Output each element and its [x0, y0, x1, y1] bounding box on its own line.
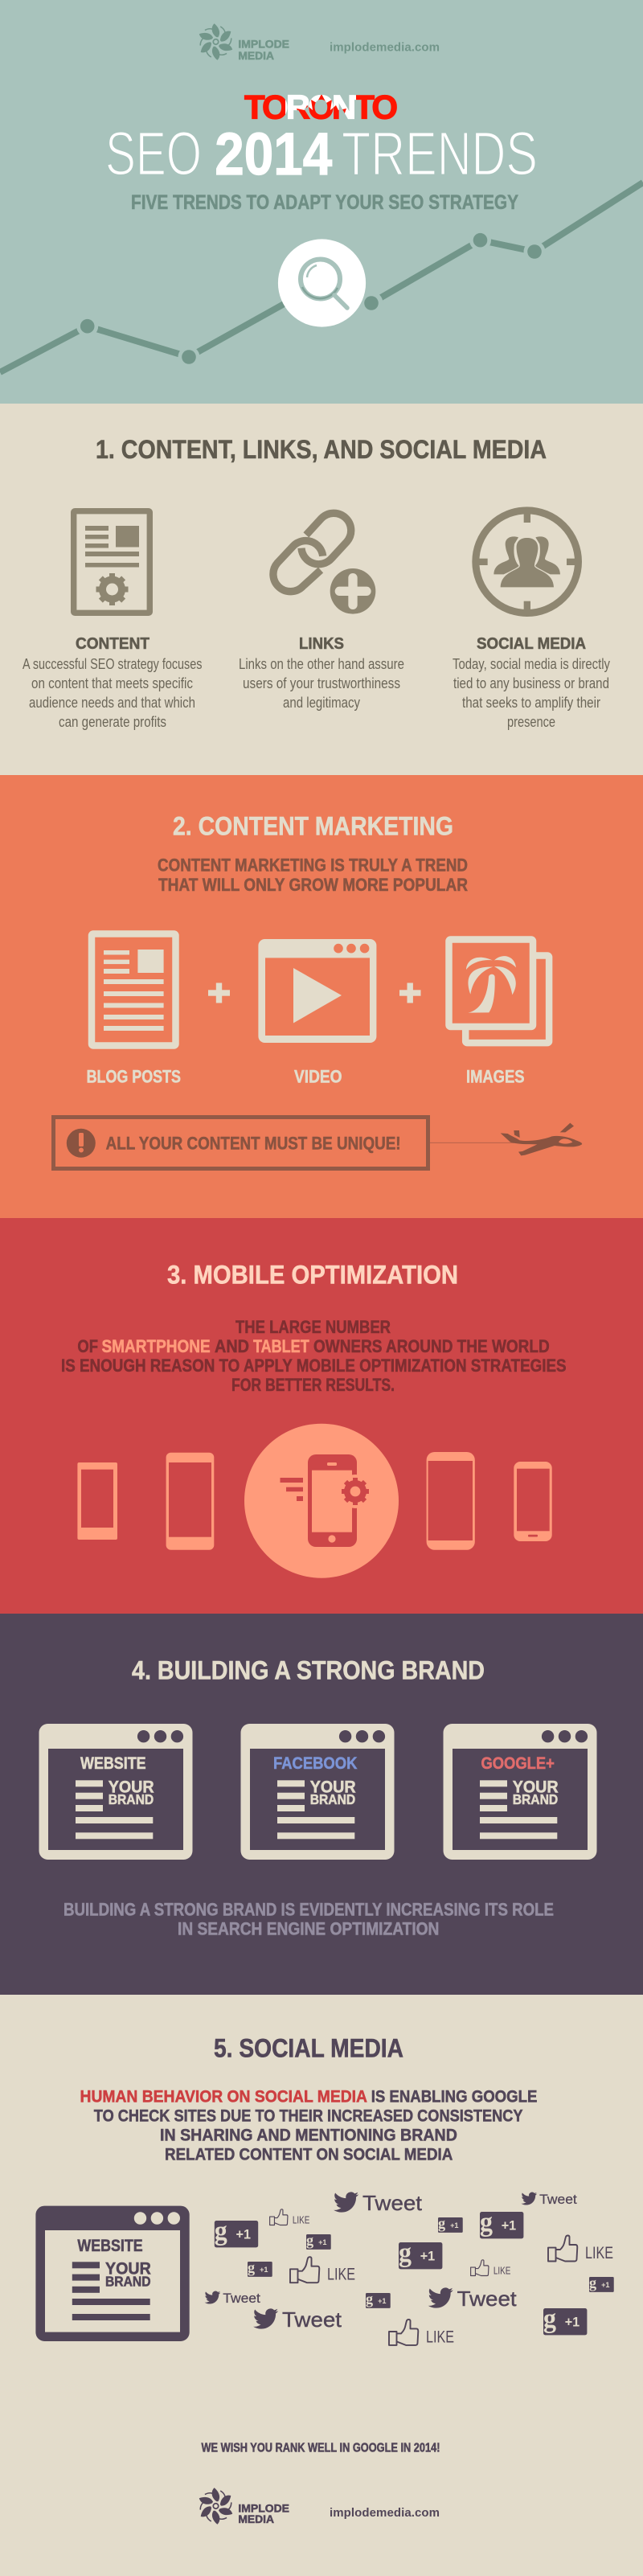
logo: Implode Media footer: IMPLODE [238, 2502, 289, 2515]
browser window: website: BRAND [105, 2273, 151, 2289]
column: links: users of your trustworthiness [243, 675, 400, 691]
icon: content document [74, 511, 149, 613]
google plus one button [480, 2208, 523, 2238]
label: images: IMAGES [466, 1066, 524, 1087]
browser window: website: YOUR [109, 1778, 154, 1796]
logo: Implode Media: MEDIA [238, 49, 274, 62]
column: social media: tied to any business or brand [453, 675, 609, 691]
google plus one button [215, 2217, 258, 2247]
small like button [471, 2260, 511, 2276]
panel: 1. content, links, and social media [0, 404, 643, 775]
small google plus one button: +1 [601, 2281, 610, 2290]
logo: Implode Media footer [195, 2488, 289, 2525]
body text: TABLET [253, 1336, 309, 1356]
logo url: implodemedia.com [330, 40, 440, 55]
intro text [158, 855, 468, 895]
browser window: facebook: FACEBOOK [273, 1754, 357, 1773]
icon: central mobile phone with gear [244, 1424, 399, 1578]
intro text: THAT WILL ONLY GROW MORE POPULAR [158, 875, 468, 895]
icon: phone 4 [514, 1462, 552, 1541]
line chart: rising trend [0, 183, 643, 372]
google plus one button: g [215, 2217, 227, 2246]
small google plus one button: g [248, 2260, 255, 2277]
column: social media: that seeks to amplify their [462, 694, 600, 711]
heading: 4. BUILDING A STRONG BRAND [132, 1656, 485, 1685]
small google plus one button: g [366, 2291, 373, 2308]
like button: LIKE [585, 2244, 613, 2262]
title: SEO 2014 Trends: SEO [105, 119, 202, 188]
icon: social media people in target [476, 511, 578, 613]
heading: 1. CONTENT, LINKS, AND SOCIAL MEDIA [96, 435, 547, 464]
caption [63, 1899, 554, 1938]
browser window: facebook [241, 1724, 394, 1860]
small tweet button [521, 2192, 577, 2207]
column: social media: Today, social media is directly [453, 655, 611, 672]
small google plus one button: +1 [318, 2238, 327, 2247]
like button [389, 2320, 454, 2346]
heading: 3. MOBILE OPTIMIZATION [167, 1261, 458, 1290]
small google plus one button [438, 2216, 463, 2233]
google plus one button: g [480, 2208, 493, 2238]
small google plus one button [366, 2291, 391, 2308]
title: SEO 2014 Trends: TRENDS [342, 119, 538, 188]
small tweet button: Tweet [539, 2192, 577, 2207]
browser window: website [35, 2206, 190, 2341]
google plus one button [543, 2304, 587, 2335]
panel: header [0, 0, 643, 404]
browser window: google plus: YOUR [513, 1778, 559, 1796]
tweet button [428, 2287, 517, 2311]
column: social media: SOCIAL MEDIA [477, 635, 586, 653]
google plus one button: g [399, 2238, 412, 2268]
subtitle: FIVE TRENDS TO ADAPT YOUR SEO STRATEGY [131, 191, 518, 214]
browser window: website: BRAND [109, 1791, 154, 1807]
body text [80, 2086, 537, 2164]
column: content: CONTENT [76, 635, 149, 653]
icon: phone 1 [77, 1462, 117, 1540]
callout: unique content banner: ALL YOUR CONTENT MUST BE UNIQUE! [106, 1134, 401, 1153]
google plus one button [399, 2238, 442, 2269]
body text [61, 1317, 567, 1395]
body text: RELATED CONTENT ON SOCIAL MEDIA [165, 2144, 453, 2164]
icon: plus [399, 982, 421, 1003]
browser window: google plus: BRAND [513, 1791, 558, 1807]
tweet button: Tweet [457, 2287, 517, 2311]
logo: Implode Media footer: MEDIA [238, 2512, 274, 2525]
body text: IS ENOUGH REASON TO APPLY MOBILE OPTIMIZATION STRATEGIES [61, 1356, 567, 1376]
icon: airplane towing banner [430, 1123, 582, 1155]
panel: 5. social media [0, 1995, 643, 2576]
panel: 4. building a strong brand [0, 1614, 643, 1995]
icon: images with palm tree [448, 939, 549, 1043]
small like button: LIKE [494, 2264, 511, 2276]
google plus one button: g [543, 2304, 556, 2334]
tweet button: Tweet [362, 2191, 423, 2215]
column: content: can generate profits [59, 713, 166, 730]
column: links [239, 635, 404, 711]
small google plus one button: +1 [450, 2221, 459, 2230]
title: SEO 2014 Trends: 2014 [215, 121, 332, 187]
small google plus one button: +1 [260, 2266, 268, 2275]
small google plus one button [589, 2275, 614, 2292]
body text: IN SHARING AND MENTIONING BRAND [160, 2125, 457, 2144]
google plus one button: +1 [420, 2249, 435, 2264]
panel: 2. content marketing [0, 775, 643, 1218]
browser window: google plus [444, 1724, 596, 1860]
icon: video player [258, 939, 376, 1043]
closing message: WE WISH YOU RANK WELL IN GOOGLE IN 2014! [201, 2442, 440, 2455]
browser window: google plus: GOOGLE+ [481, 1754, 555, 1773]
like button [290, 2257, 355, 2284]
body text: HUMAN BEHAVIOR ON SOCIAL MEDIA [80, 2086, 367, 2106]
tweet button [334, 2191, 423, 2215]
logo: Implode Media [195, 23, 289, 62]
column: content [23, 635, 203, 730]
callout: unique content banner [53, 1118, 428, 1169]
tweet button: Tweet [282, 2307, 342, 2332]
like button: LIKE [327, 2266, 355, 2284]
google plus one button: +1 [502, 2218, 516, 2233]
column: content: on content that meets specific [31, 675, 193, 691]
logo url footer: implodemedia.com [330, 2506, 440, 2520]
body text: SMARTPHONE [101, 1336, 211, 1356]
panel: 3. mobile optimization [0, 1218, 643, 1614]
browser window: facebook: YOUR [310, 1778, 356, 1796]
browser window: website: YOUR [105, 2260, 151, 2279]
title: Toronto: TORONTO [244, 88, 398, 125]
small like button [270, 2209, 310, 2225]
intro text: CONTENT MARKETING IS TRULY A TREND [158, 855, 468, 875]
browser window: website: WEBSITE [80, 1754, 146, 1773]
google plus one button: +1 [565, 2315, 580, 2330]
small google plus one button [306, 2233, 331, 2250]
column: links: Links on the other hand assure [239, 655, 404, 672]
icon: magnifying glass in white circle [278, 239, 366, 327]
caption: BUILDING A STRONG BRAND IS EVIDENTLY INCREASING ITS ROLE [63, 1899, 554, 1919]
browser window: facebook: BRAND [310, 1791, 355, 1807]
google plus one button: +1 [235, 2227, 251, 2242]
tweet button [253, 2307, 342, 2332]
small google plus one button: g [438, 2216, 445, 2233]
browser window: website: WEBSITE [77, 2237, 143, 2255]
like button: LIKE [426, 2328, 454, 2346]
body text: IS ENABLING GOOGLE [371, 2086, 537, 2106]
label: blog posts: BLOG POSTS [87, 1066, 181, 1087]
icon: phone 3 [427, 1452, 475, 1550]
small google plus one button: g [589, 2275, 596, 2292]
small google plus one button: +1 [378, 2297, 387, 2306]
label: video: VIDEO [294, 1066, 342, 1087]
column: social media: presence [507, 713, 555, 730]
title: SEO 2014 Trends [105, 119, 538, 188]
caption: IN SEARCH ENGINE OPTIMIZATION [178, 1918, 439, 1938]
small google plus one button [248, 2260, 272, 2277]
body text: THE LARGE NUMBER [235, 1317, 391, 1337]
icon: plus [208, 982, 230, 1003]
column: social media [453, 635, 611, 730]
icon: phone 2 [166, 1453, 214, 1550]
body text: FOR BETTER RESULTS. [231, 1375, 395, 1395]
column: links: and legitimacy [283, 694, 361, 711]
heading: 2. CONTENT MARKETING [173, 812, 453, 841]
body text: TO CHECK SITES DUE TO THEIR INCREASED CONSISTENCY [94, 2106, 523, 2125]
icon: blog posts [92, 934, 175, 1045]
column: links: LINKS [299, 635, 344, 653]
small tweet button [205, 2291, 260, 2306]
small like button: LIKE [293, 2213, 310, 2225]
body text: AND [215, 1336, 249, 1356]
body text: OWNERS AROUND THE WORLD [313, 1336, 550, 1356]
small tweet button: Tweet [223, 2291, 260, 2306]
browser window: website [39, 1724, 193, 1860]
column: content: A successful SEO strategy focuses [23, 655, 203, 672]
heading: 5. SOCIAL MEDIA [214, 2034, 403, 2063]
social buttons cloud [205, 2191, 614, 2346]
like button [548, 2235, 613, 2262]
icon: links chain with plus [273, 513, 375, 614]
small google plus one button: g [306, 2233, 313, 2250]
body text: OF [77, 1336, 98, 1356]
logo: Implode Media: IMPLODE [238, 38, 289, 51]
column: content: audience needs and that which [29, 694, 195, 711]
